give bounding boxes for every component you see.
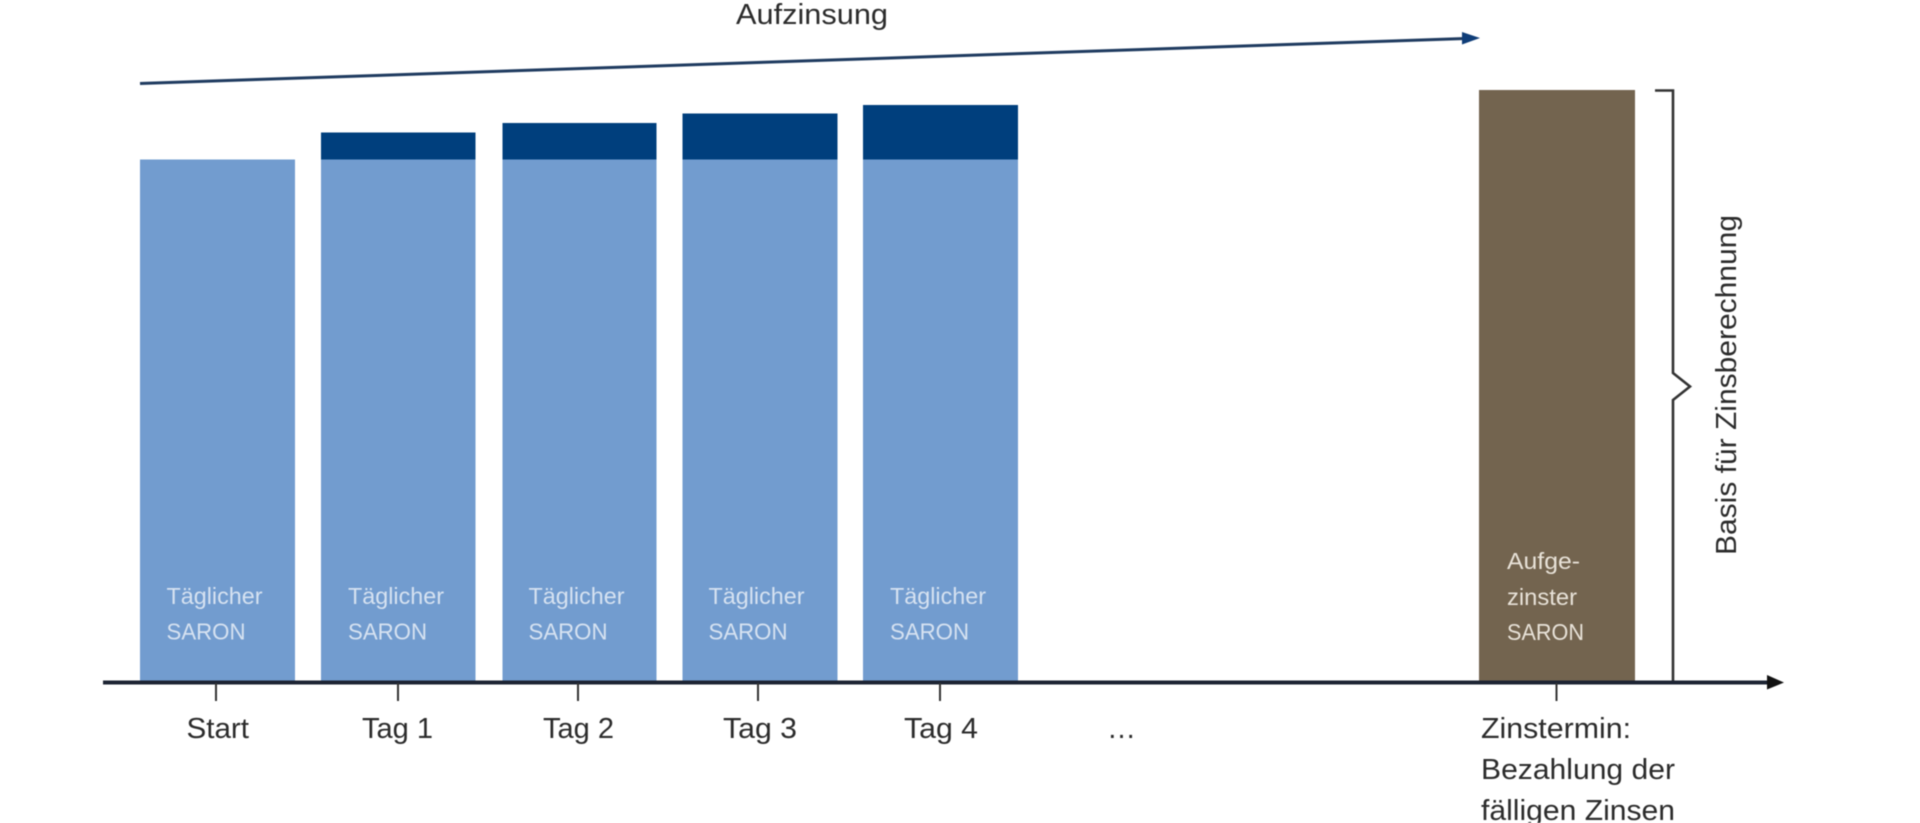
bar: Tag 3: Täglicher [708,583,805,609]
label: ellipsis: … [1107,713,1136,745]
bar: Tag 4: Täglicher [890,583,986,609]
label: Tag 2: Tag 2 [543,713,614,745]
bar: Aufgezinster SARON: SARON [1507,619,1584,645]
brace: basis bracket [1655,90,1690,682]
label: Tag 1: Tag 1 [362,713,433,745]
label: Tag 3: Tag 3 [723,713,797,745]
arrow: compounding trend [140,32,1480,84]
label: Zinstermin [1481,713,1675,823]
bar: Tag 4 [863,105,1018,682]
label: Start: Start [186,713,249,745]
label: Basis für Zinsberechnung: Basis für Zinsberechnung [1711,215,1743,555]
bar: Tag 3: SARON [708,618,788,644]
bar: Tag 2: SARON [528,618,608,644]
bar: Tag 1: Täglicher [348,583,444,609]
bar: Start [140,160,295,682]
label: Zinstermin: Zinstermin: [1481,713,1631,745]
bar: Tag 3 [682,114,838,682]
bar: Tag 2 [502,123,656,682]
bar: Aufgezinster SARON: Aufge- [1507,548,1580,574]
axis: timeline [103,675,1784,701]
bar: Aufgezinster SARON [1479,90,1635,682]
bar: Tag 2: Täglicher [528,583,625,609]
bar: Tag 1 [321,132,476,682]
bar: Start: Täglicher [166,583,263,609]
bar: Aufgezinster SARON: zinster [1507,584,1577,610]
bar: Start: SARON [166,618,246,644]
bar: Tag 1: SARON [348,618,427,644]
bar: Tag 4: SARON [890,618,969,644]
label: Tag 4: Tag 4 [904,713,978,745]
label: Zinstermin: Bezahlung der [1481,754,1675,786]
